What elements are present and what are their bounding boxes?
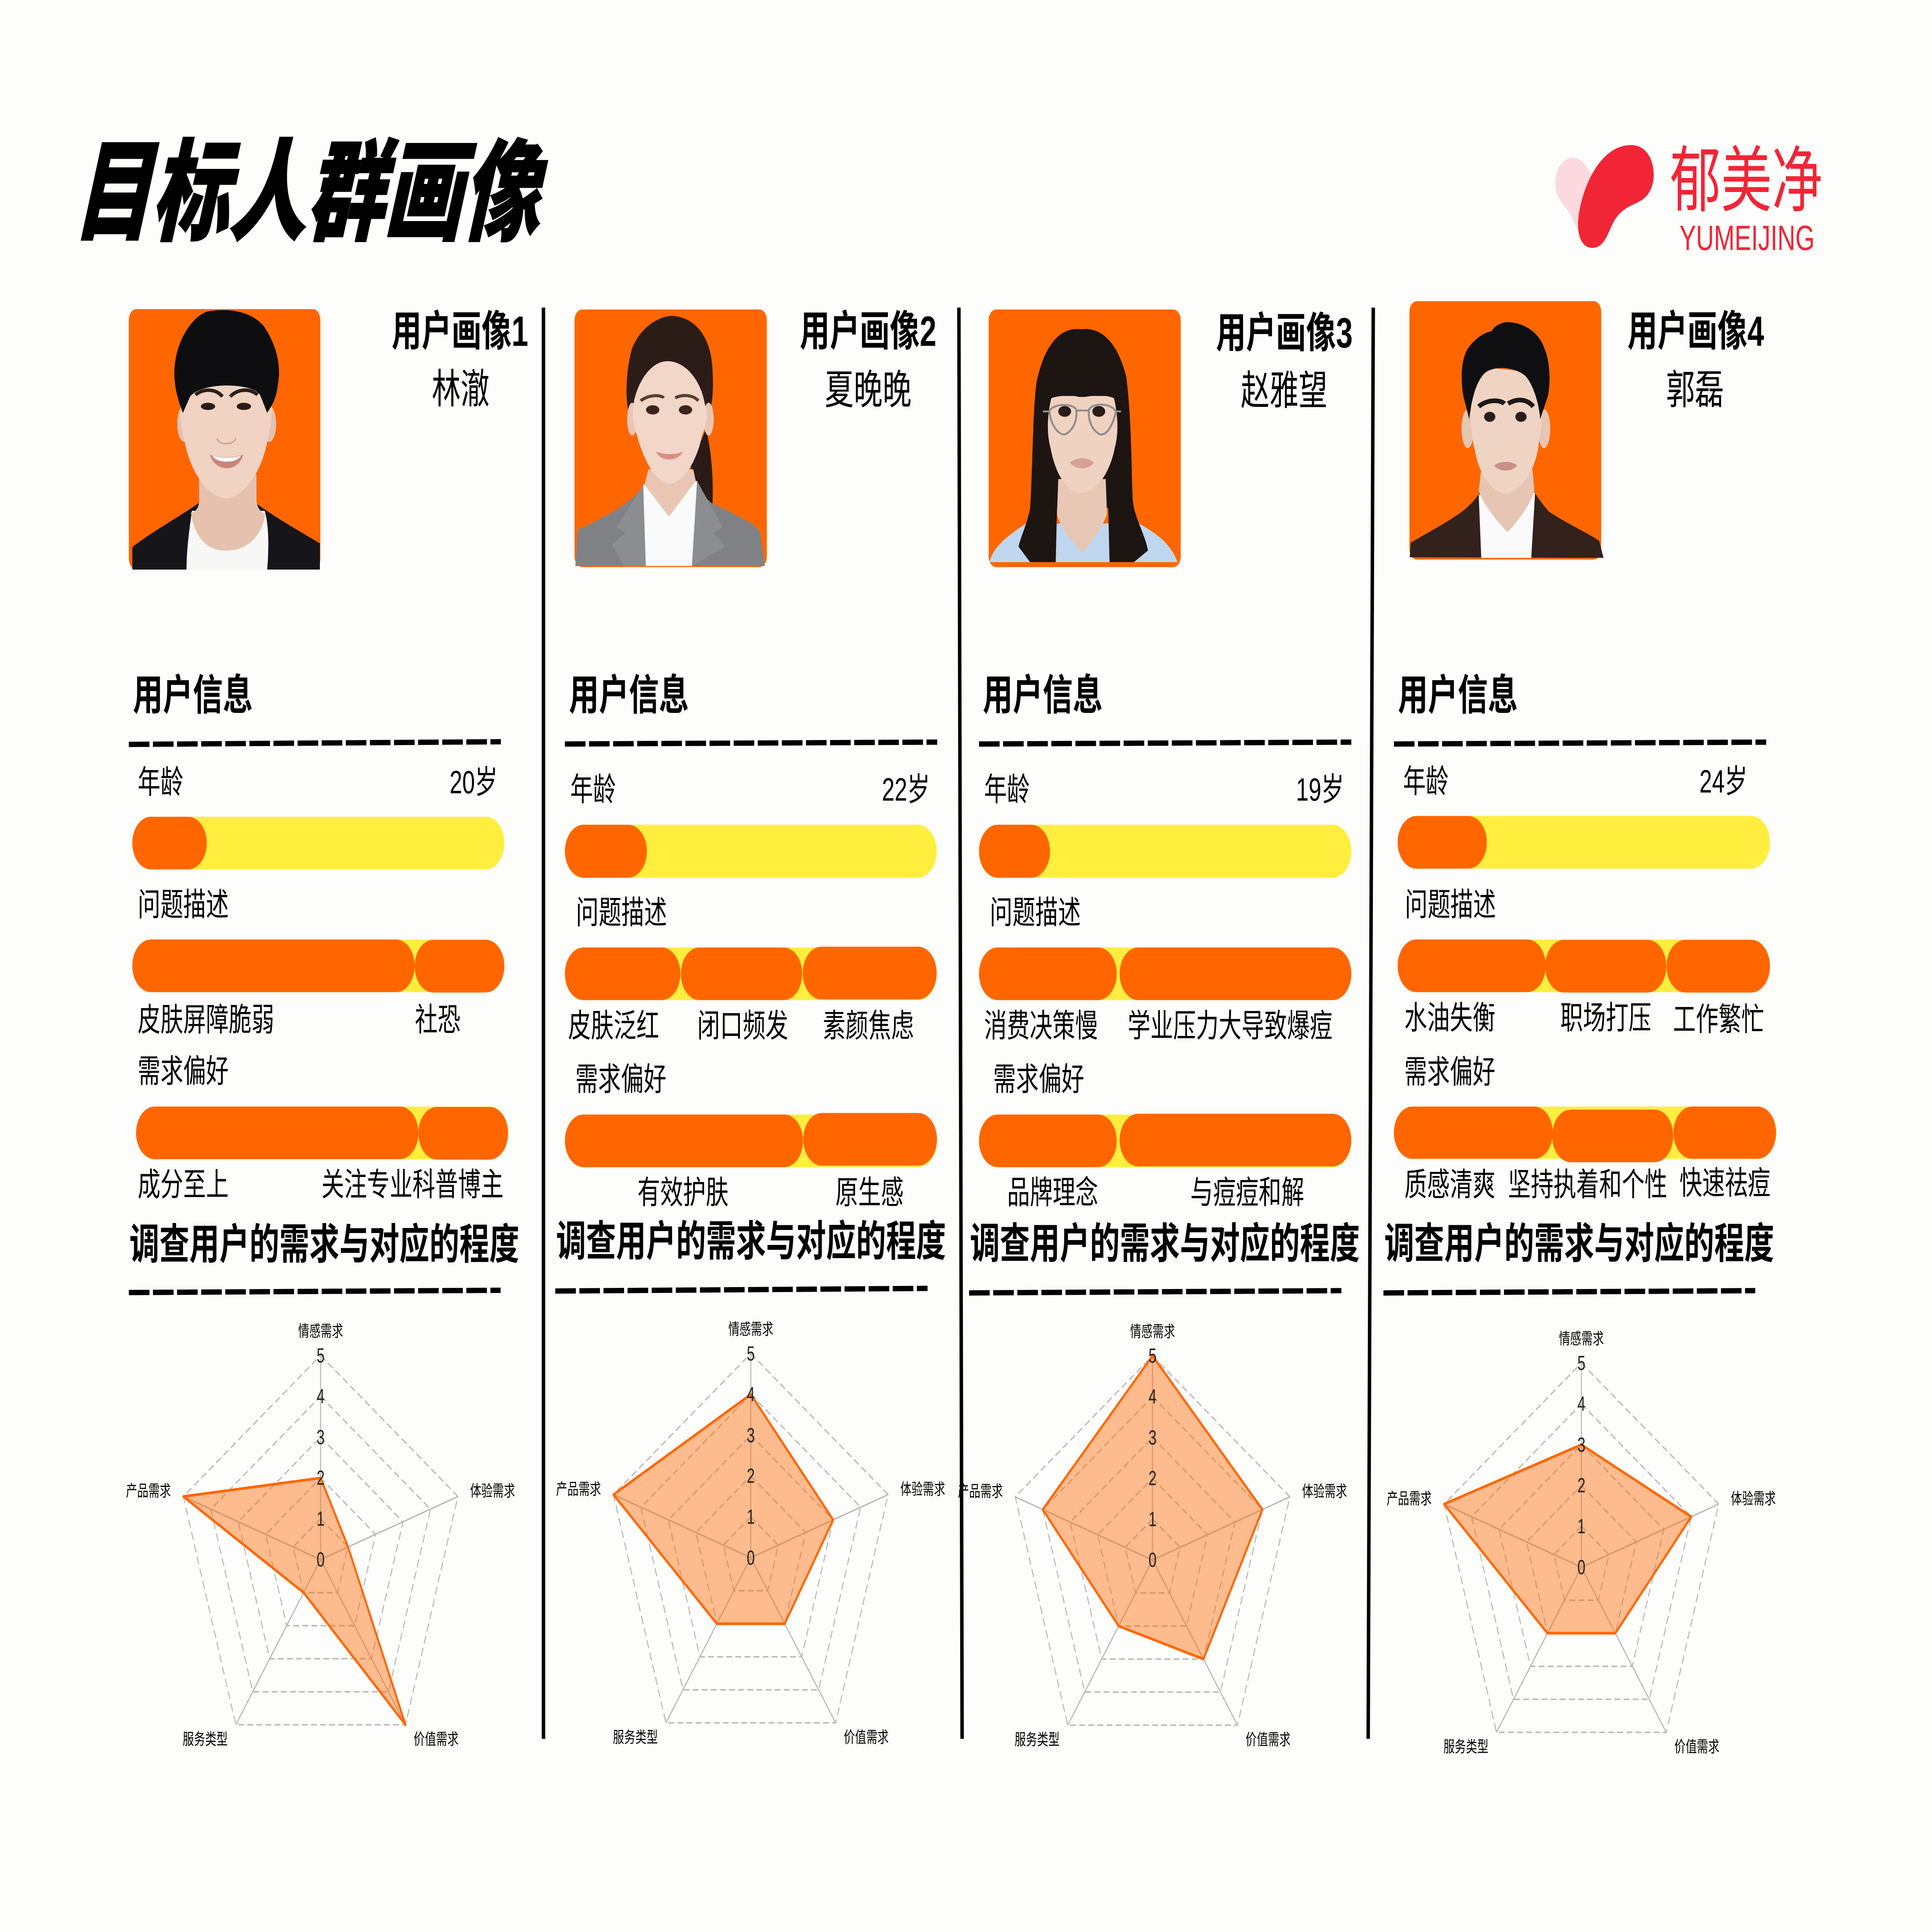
problem items: 消费决策慢 bbox=[984, 1009, 1098, 1044]
portrait 1 bbox=[129, 309, 320, 570]
problem items: 学业压力大导致爆痘 bbox=[1128, 1009, 1333, 1044]
radar chart 1: 1 bbox=[316, 1507, 325, 1530]
panel: user persona 3 bbox=[958, 310, 1360, 1748]
radar chart 2: 产品需求 bbox=[556, 1480, 601, 1498]
radar chart 4 bbox=[1387, 1330, 1776, 1756]
logo latin name: YUMEIJING bbox=[1679, 218, 1815, 257]
preference items bbox=[138, 1167, 503, 1203]
radar chart 3: 1 bbox=[1148, 1508, 1156, 1531]
radar chart 2: 5 bbox=[747, 1342, 755, 1365]
radar chart 2: 情感需求 bbox=[728, 1320, 773, 1338]
radar chart 3: 情感需求 bbox=[1130, 1323, 1175, 1340]
radar chart 3: 产品需求 bbox=[958, 1483, 1003, 1500]
age label: 年龄 bbox=[138, 765, 183, 801]
age bar bbox=[979, 825, 1351, 878]
problem items: 素颜焦虑 bbox=[823, 1009, 914, 1044]
radar chart 2: 体验需求 bbox=[900, 1480, 945, 1498]
radar chart 2: 0 bbox=[747, 1546, 755, 1569]
persona name: 郭磊 bbox=[1666, 367, 1724, 413]
radar chart 4: 价值需求 bbox=[1674, 1738, 1719, 1756]
problem label: 问题描述 bbox=[576, 895, 667, 931]
logo: YUMEIJING bbox=[1555, 141, 1823, 257]
survey heading: 调查用户的需求与对应的程度 bbox=[970, 1220, 1360, 1268]
problem items: 皮肤屏障脆弱 bbox=[138, 1002, 274, 1038]
radar chart 2: 3 bbox=[747, 1424, 755, 1447]
portrait 4 bbox=[1410, 301, 1604, 560]
preference bar bbox=[565, 1113, 937, 1167]
radar chart 2 bbox=[556, 1320, 945, 1746]
radar chart 1 bbox=[126, 1322, 515, 1748]
problem bar bbox=[132, 939, 504, 993]
logo wordmark: 郁美净 bbox=[1670, 141, 1823, 221]
radar chart 4: 0 bbox=[1577, 1556, 1585, 1578]
persona heading: 用户画像1 bbox=[391, 308, 528, 355]
problem label: 问题描述 bbox=[990, 895, 1081, 931]
problem items: 水油失衡 bbox=[1404, 1000, 1495, 1036]
radar chart 4: 产品需求 bbox=[1387, 1490, 1432, 1508]
radar chart 3: 体验需求 bbox=[1302, 1483, 1347, 1500]
user info heading: 用户信息 bbox=[983, 672, 1103, 719]
user info heading: 用户信息 bbox=[133, 672, 253, 719]
preference items bbox=[1404, 1166, 1770, 1203]
preference label: 需求偏好 bbox=[1404, 1054, 1495, 1090]
user info heading: 用户信息 bbox=[1398, 672, 1518, 719]
radar chart 3: 4 bbox=[1148, 1385, 1156, 1408]
radar chart 1: 产品需求 bbox=[126, 1482, 171, 1500]
preference items: 坚持执着和个性 bbox=[1508, 1167, 1667, 1203]
problem label: 问题描述 bbox=[138, 887, 229, 923]
preference label: 需求偏好 bbox=[575, 1062, 667, 1097]
preference bar bbox=[979, 1114, 1351, 1167]
persona name: 夏晚晚 bbox=[825, 367, 912, 413]
radar chart 1: 服务类型 bbox=[183, 1730, 228, 1748]
problem items bbox=[138, 1002, 461, 1038]
age bar bbox=[1398, 816, 1770, 869]
radar chart 4: 3 bbox=[1577, 1434, 1585, 1456]
radar chart 3: 3 bbox=[1148, 1426, 1156, 1449]
problem items bbox=[984, 1009, 1333, 1044]
user info heading: 用户信息 bbox=[569, 672, 689, 719]
preference items bbox=[1007, 1175, 1304, 1211]
radar chart 1: 体验需求 bbox=[470, 1482, 515, 1500]
persona name: 林澈 bbox=[432, 367, 490, 412]
problem items: 闭口频发 bbox=[697, 1009, 788, 1044]
preference items: 快速祛痘 bbox=[1679, 1166, 1770, 1201]
age label: 年龄 bbox=[570, 772, 616, 808]
radar chart 1: 价值需求 bbox=[413, 1730, 459, 1748]
persona name: 赵雅望 bbox=[1241, 368, 1327, 414]
radar chart 1: 情感需求 bbox=[298, 1322, 343, 1340]
problem items: 工作繁忙 bbox=[1673, 1002, 1764, 1037]
radar chart 4: 服务类型 bbox=[1444, 1738, 1488, 1756]
age label: 年龄 bbox=[984, 772, 1030, 808]
problem bar bbox=[565, 947, 937, 1000]
radar chart 1: 0 bbox=[316, 1548, 325, 1571]
age label: 年龄 bbox=[1403, 764, 1449, 800]
panel: user persona 2 bbox=[555, 308, 946, 1746]
radar chart 3 bbox=[958, 1323, 1347, 1748]
radar chart 2: 4 bbox=[747, 1383, 755, 1406]
preference items: 原生感 bbox=[835, 1175, 904, 1211]
age value: 19岁 bbox=[1296, 772, 1344, 808]
preference items bbox=[638, 1175, 904, 1211]
radar chart 3: 5 bbox=[1148, 1344, 1156, 1367]
problem bar bbox=[979, 947, 1351, 1000]
persona heading: 用户画像3 bbox=[1216, 310, 1353, 357]
radar chart 4: 2 bbox=[1577, 1474, 1585, 1497]
survey heading: 调查用户的需求与对应的程度 bbox=[556, 1218, 946, 1265]
preference items: 品牌理念 bbox=[1007, 1175, 1098, 1211]
preference items: 质感清爽 bbox=[1404, 1167, 1495, 1203]
radar chart 3: 服务类型 bbox=[1015, 1731, 1060, 1748]
preference items: 成分至上 bbox=[138, 1167, 229, 1203]
radar chart 1: 5 bbox=[316, 1344, 325, 1367]
radar chart 3: 2 bbox=[1148, 1467, 1156, 1490]
problem bar bbox=[1398, 939, 1770, 993]
portrait 2 bbox=[575, 310, 767, 567]
radar chart 4: 5 bbox=[1577, 1352, 1585, 1374]
panel: user persona 1 bbox=[126, 308, 528, 1748]
problem items bbox=[568, 1009, 914, 1044]
survey heading: 调查用户的需求与对应的程度 bbox=[129, 1221, 519, 1269]
age bar bbox=[565, 825, 937, 878]
radar chart 2: 价值需求 bbox=[844, 1728, 889, 1746]
age value: 24岁 bbox=[1699, 764, 1747, 800]
radar chart 1: 3 bbox=[316, 1426, 325, 1449]
survey heading: 调查用户的需求与对应的程度 bbox=[1384, 1220, 1774, 1268]
problem items: 社恐 bbox=[415, 1002, 461, 1038]
preference label: 需求偏好 bbox=[138, 1054, 229, 1090]
persona heading: 用户画像2 bbox=[800, 308, 936, 355]
preference bar bbox=[136, 1107, 508, 1160]
preference items: 与痘痘和解 bbox=[1190, 1175, 1304, 1211]
problem items: 皮肤泛红 bbox=[568, 1009, 659, 1044]
preference bar bbox=[1394, 1107, 1776, 1162]
radar chart 3: 价值需求 bbox=[1245, 1731, 1291, 1748]
radar chart 4: 1 bbox=[1577, 1515, 1585, 1537]
preference label: 需求偏好 bbox=[993, 1062, 1084, 1097]
radar chart 1: 2 bbox=[316, 1466, 325, 1489]
radar chart 4: 4 bbox=[1577, 1393, 1585, 1415]
radar chart 1: 4 bbox=[316, 1385, 325, 1408]
preference items: 有效护肤 bbox=[638, 1175, 728, 1211]
preference items: 关注专业科普博主 bbox=[321, 1167, 503, 1203]
title: 目标人群画像 bbox=[68, 132, 560, 255]
portrait 3 bbox=[989, 310, 1181, 567]
radar chart 4: 体验需求 bbox=[1731, 1490, 1776, 1508]
radar chart 2: 1 bbox=[747, 1505, 755, 1528]
age value: 20岁 bbox=[450, 765, 498, 801]
icon: heart mark bbox=[1555, 145, 1654, 248]
age bar bbox=[132, 817, 504, 869]
column dividers bbox=[543, 308, 1373, 1739]
persona heading: 用户画像4 bbox=[1628, 308, 1764, 355]
radar chart 4: 情感需求 bbox=[1559, 1330, 1604, 1348]
panel: user persona 4 bbox=[1383, 301, 1776, 1756]
problem label: 问题描述 bbox=[1405, 887, 1496, 923]
age value: 22岁 bbox=[882, 772, 930, 808]
radar chart 3: 0 bbox=[1148, 1549, 1156, 1571]
radar chart 2: 2 bbox=[747, 1464, 755, 1487]
problem items: 职场打压 bbox=[1560, 1000, 1651, 1036]
problem items bbox=[1404, 1000, 1764, 1037]
radar chart 2: 服务类型 bbox=[613, 1728, 658, 1746]
